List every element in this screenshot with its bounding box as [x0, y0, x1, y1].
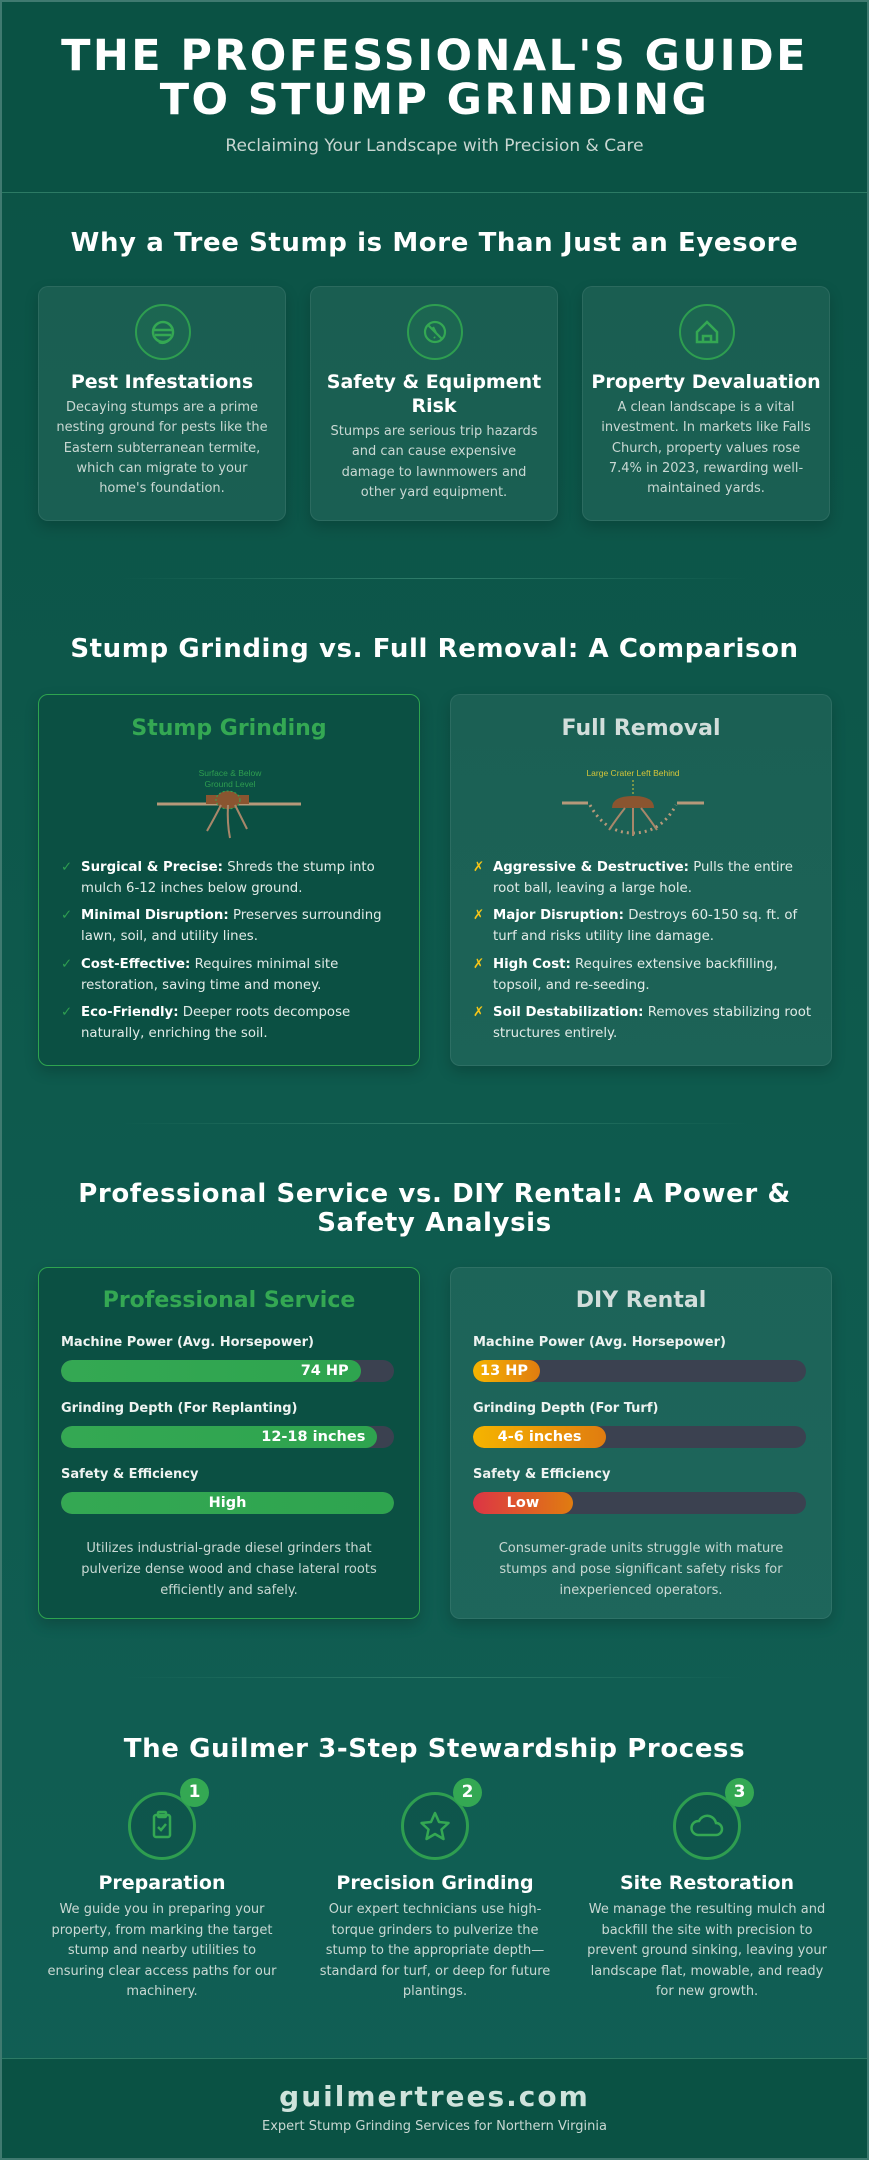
badge: 3	[734, 1782, 745, 1802]
title	[61, 31, 808, 125]
list: removal drawbacks: Aggressive & Destructive: Pulls the entire root ball, leaving a large hole.	[493, 860, 793, 896]
badge: 2	[462, 1782, 473, 1802]
header	[2, 2, 867, 193]
footer	[2, 2058, 867, 2160]
diagram: grinding: Surface & Below	[199, 768, 262, 778]
icon: star	[401, 1792, 469, 1860]
panel: pest infestations	[38, 286, 286, 521]
badge	[725, 1778, 754, 1807]
step text: We guide you in preparing your property, from marking the target stump and nearby utilities to ensuring clear access paths for our machinery.	[48, 1902, 276, 1999]
step text: We manage the resulting mulch and backfill the site with precision to prevent ground sinking, leaving your landscape flat, mowable, and ready for new growth.	[587, 1902, 827, 1999]
footer tagline: Expert Stump Grinding Services for Northern Virginia	[262, 2119, 607, 2134]
description: Consumer-grade units struggle with mature stumps and pose significant safety risks for inexperienced operators.	[499, 1541, 783, 1598]
panel: professional service	[38, 1267, 420, 1619]
step title: Preparation	[98, 1872, 225, 1894]
card title: DIY Rental	[576, 1288, 706, 1313]
diagram: crater: Large Crater Left Behind	[586, 768, 680, 778]
list: grinding benefits	[61, 860, 382, 1041]
step title: Site Restoration	[620, 1872, 794, 1894]
heading: why a stump: Why a Tree Stump is More Than Just an Eyesore	[71, 228, 798, 258]
panel: professional service: 12-18 inches	[261, 1429, 365, 1445]
description: Utilizes industrial-grade diesel grinders that pulverize dense wood and chase lateral roots efficiently and safely.	[81, 1541, 377, 1598]
list: grinding benefits: ✓	[61, 860, 72, 875]
card title: Safety & Equipment	[327, 371, 541, 393]
heading: process: The Guilmer 3-Step Stewardship Process	[124, 1734, 745, 1764]
diagram: grinding	[157, 768, 301, 838]
heading: pro vs diy	[78, 1179, 791, 1238]
card title: Stump Grinding	[131, 716, 327, 741]
bar: power: Machine Power (Avg. Horsepower)	[61, 1335, 314, 1350]
bar: depth: Grinding Depth (For Replanting)	[61, 1401, 298, 1416]
step text: Our expert technicians use high-torque grinders to pulverize the stump to the appropriate depth—standard for turf, or deep for future plantings.	[320, 1902, 550, 1999]
panel: professional service: 74 HP	[301, 1363, 349, 1379]
list: removal drawbacks: Major Disruption: Destroys 60-150 sq. ft. of turf and risks utility line damage.	[493, 908, 797, 944]
card text: Stumps are serious trip hazards and can cause expensive damage to lawnmowers and other yard equipment.	[331, 424, 537, 500]
list: removal drawbacks: ✗	[473, 1005, 484, 1020]
panel: property devaluation	[582, 286, 830, 521]
step 1	[48, 1778, 276, 1999]
panel: full removal	[450, 694, 832, 1066]
badge: 1	[189, 1782, 200, 1802]
list: removal drawbacks	[473, 860, 811, 1041]
diagram: grinding: Ground Level	[204, 779, 256, 789]
icon: cloud	[673, 1792, 741, 1860]
list: grinding benefits: Surgical & Precise: Shreds the stump into mulch 6-12 inches below ground.	[81, 860, 375, 896]
list: removal drawbacks: ✗	[473, 957, 484, 972]
heading: pro vs diy: Safety Analysis	[317, 1208, 552, 1238]
icon: no sign	[407, 304, 463, 360]
badge	[453, 1778, 482, 1807]
list: removal drawbacks: High Cost: Requires extensive backfilling, topsoil, and re-seeding.	[493, 957, 778, 993]
list: removal drawbacks: Soil Destabilization: Removes stabilizing root structures entirely.	[493, 1005, 811, 1041]
card title: Property Devaluation	[591, 371, 821, 393]
step 2	[320, 1778, 550, 1999]
subtitle: Reclaiming Your Landscape with Precision & Care	[225, 136, 644, 156]
card text: Decaying stumps are a prime nesting ground for pests like the Eastern subterranean termite, which can migrate to your home's foundation.	[56, 400, 268, 496]
bar: safety: Safety & Efficiency	[61, 1467, 198, 1482]
bar: power: Machine Power (Avg. Horsepower)	[473, 1335, 726, 1350]
step 3	[587, 1778, 827, 1999]
bar: safety: Safety & Efficiency	[473, 1467, 610, 1482]
icon: house	[679, 304, 735, 360]
heading: comparison: Stump Grinding vs. Full Removal: A Comparison	[70, 634, 799, 664]
title: TO STUMP GRINDING	[160, 75, 709, 125]
card title: Full Removal	[562, 716, 720, 741]
list: removal drawbacks: ✗	[473, 860, 484, 875]
list: removal drawbacks: ✗	[473, 908, 484, 923]
card title	[327, 371, 541, 417]
list: grinding benefits: ✓	[61, 908, 72, 923]
list: grinding benefits: Cost-Effective: Requires minimal site restoration, saving time and money.	[81, 957, 338, 993]
card title: Pest Infestations	[71, 371, 253, 393]
list: grinding benefits: ✓	[61, 1005, 72, 1020]
heading: pro vs diy: Professional Service vs. DIY Rental: A Power &	[78, 1179, 791, 1209]
card title: Professional Service	[103, 1288, 355, 1313]
footer site: guilmertrees.com	[279, 2080, 590, 2113]
list: grinding benefits: ✓	[61, 957, 72, 972]
panel: diy rental: 4-6 inches	[498, 1429, 582, 1445]
panel: professional service: High	[209, 1495, 246, 1511]
list: grinding benefits: Minimal Disruption: Preserves surrounding lawn, soil, and utility lines.	[81, 908, 382, 944]
card title: Risk	[411, 395, 457, 417]
list: grinding benefits: Eco-Friendly: Deeper roots decompose naturally, enriching the soil.	[81, 1005, 350, 1041]
icon: pest	[135, 304, 191, 360]
badge	[180, 1778, 209, 1807]
title: THE PROFESSIONAL'S GUIDE	[61, 31, 808, 81]
panel: stump grinding	[38, 694, 420, 1066]
panel: diy rental	[450, 1267, 832, 1619]
diagram: crater	[562, 768, 704, 836]
panel: safety risk	[310, 286, 558, 521]
panel: diy rental: 13 HP	[480, 1363, 528, 1379]
step title: Precision Grinding	[336, 1872, 534, 1894]
card text: A clean landscape is a vital investment. In markets like Falls Church, property values rose 7.4% in 2023, rewarding well-maintained yards.	[601, 400, 811, 496]
panel: diy rental: Low	[507, 1495, 539, 1511]
icon: clipboard	[128, 1792, 196, 1860]
bar: depth: Grinding Depth (For Turf)	[473, 1401, 658, 1416]
